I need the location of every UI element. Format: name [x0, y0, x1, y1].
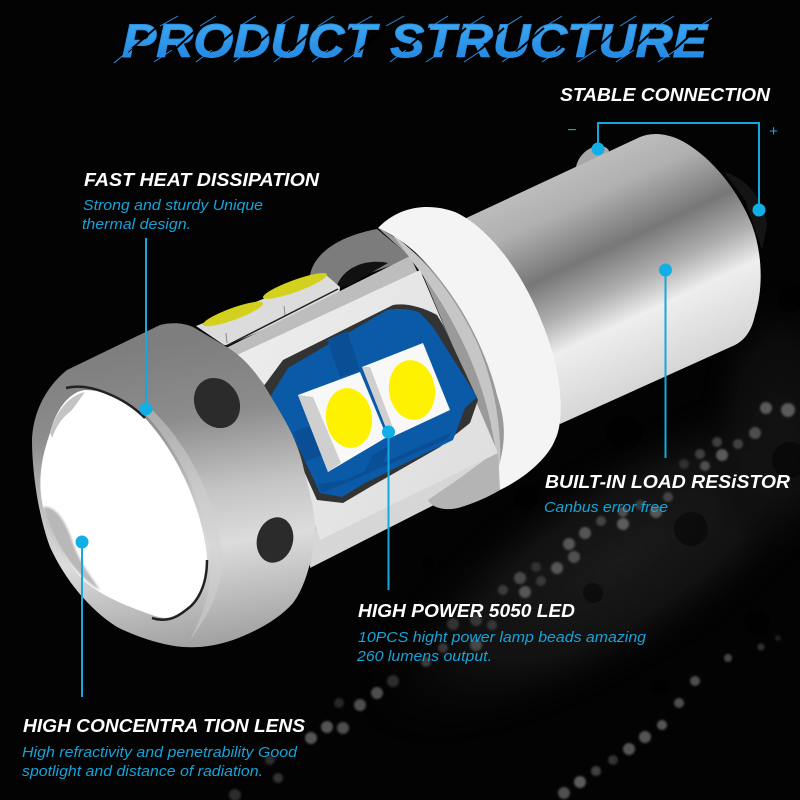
description: Strong and sturdy Unique: [83, 197, 263, 214]
left SMD chip: [298, 372, 387, 472]
callout: built-in load resistor: [544, 264, 790, 516]
dot: [76, 536, 88, 548]
description line 2: 260 lumens output.: [356, 648, 492, 665]
board shading: [293, 331, 452, 493]
blue circuit board: [270, 309, 477, 497]
dot: [382, 426, 395, 438]
lens dark edges: [66, 387, 207, 620]
dot negative: [592, 142, 604, 156]
connector: [664, 270, 666, 458]
back arch: [310, 229, 412, 285]
connector: [388, 432, 390, 590]
lower tab: [428, 450, 500, 509]
flange: [378, 207, 561, 490]
cap hole upper: [185, 369, 249, 437]
cap front ring highlight: [143, 408, 222, 640]
description: High refractivity and penetrability Good: [22, 744, 298, 761]
lens reflection: [43, 507, 100, 590]
description line 2: thermal design.: [82, 216, 191, 233]
connector: [81, 542, 83, 697]
title accent slashes: [114, 16, 712, 63]
dark background spots: [422, 288, 800, 695]
callout: high power 5050 led: HIGH POWER 5050 LED: [358, 601, 575, 621]
cap hole lower: [252, 513, 298, 567]
lens upper edge: [50, 392, 85, 438]
callout: fast heat dissipation: [82, 170, 320, 416]
dot: [140, 402, 152, 416]
flange ring highlight: [392, 234, 500, 470]
light bulb illustration: [32, 134, 767, 647]
body: [226, 256, 500, 566]
dot: [659, 264, 672, 276]
flange inner ring: [378, 228, 505, 478]
title cuts: [128, 26, 698, 52]
description line 2: spotlight and distance of radiation.: [22, 763, 263, 780]
cathode mark: +: [769, 123, 778, 140]
cap: [32, 323, 315, 647]
dot positive: [752, 204, 766, 216]
resistor cylinder: [462, 134, 761, 424]
callout: built-in load resistor: BUILT-IN LOAD RESiSTOR: [545, 472, 790, 492]
title: PRODUCT STRUCTURE: [122, 14, 709, 67]
lens: [40, 390, 207, 618]
connector: [145, 238, 147, 409]
callout: stable connection: [560, 85, 778, 216]
positive side pin: [724, 172, 767, 250]
lower body: [310, 448, 505, 568]
anode mark: −: [567, 122, 576, 139]
background haze: [307, 280, 800, 800]
bokeh lights: [229, 402, 795, 800]
top LED chips: [196, 269, 340, 346]
callout: fast heat dissipation: FAST HEAT DISSIPATION: [84, 170, 320, 190]
connector line: [598, 123, 759, 210]
callout: high power 5050 led: [356, 426, 647, 665]
callout: high concentration lens: HIGH CONCENTRA TION LENS: [23, 716, 305, 736]
right SMD chip: [362, 343, 450, 438]
description: 10PCS hight power lamp beads amazing: [358, 629, 647, 646]
negative side pin: [576, 146, 609, 167]
callout: high concentration lens: [22, 536, 305, 780]
PCB rim: [263, 304, 478, 503]
description: Canbus error free: [544, 499, 668, 516]
arch hole: [336, 262, 388, 288]
LED plate: [237, 270, 498, 540]
callout: stable connection: STABLE CONNECTION: [560, 85, 771, 105]
